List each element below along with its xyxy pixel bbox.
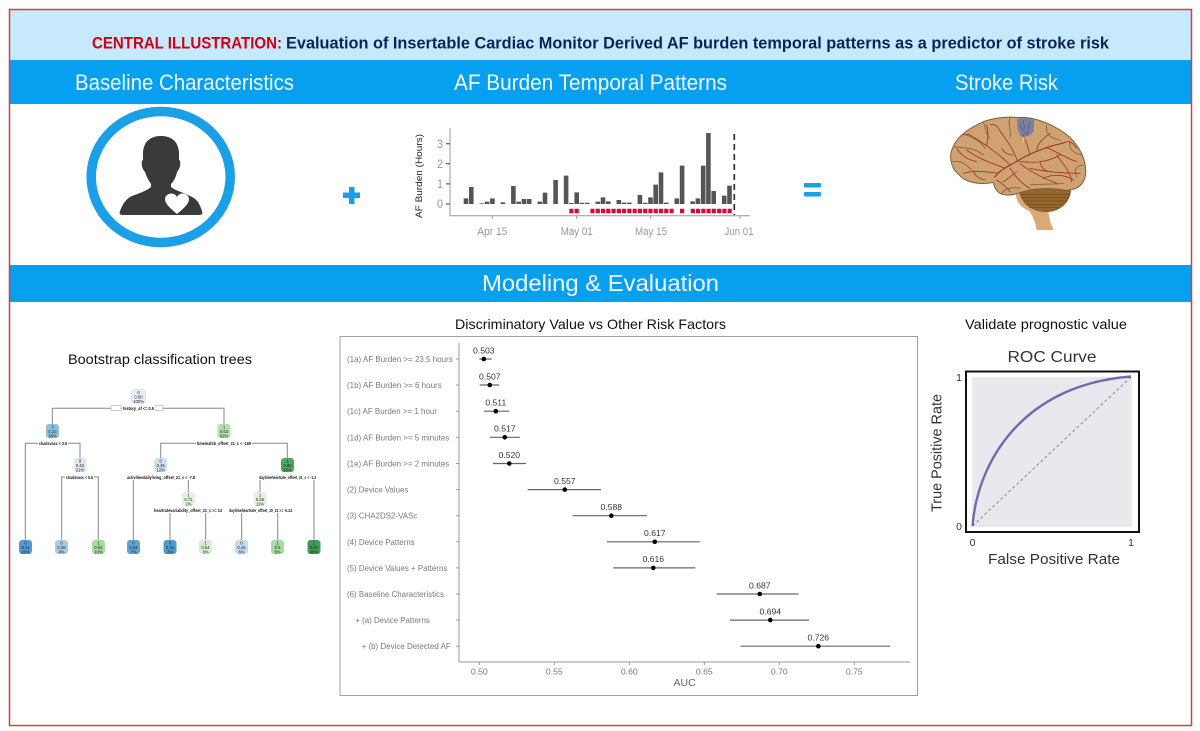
split labels: chadsvasc < 5.5: [66, 475, 93, 480]
row labels: + (b) Device Detected AF: [362, 641, 451, 651]
node: chadsvasc: [74, 458, 86, 472]
heading: Discriminatory Value vs Other Risk Factors: Discriminatory Value vs Other Risk Factors: [455, 316, 726, 332]
node: history positive: 62%: [220, 434, 228, 438]
x axis ticks and title: 0.50: [471, 666, 488, 676]
ROC curve chart: ROC Curve: [1008, 349, 1097, 366]
leaf nodes: 0.67: [310, 545, 319, 550]
node: history negative: [46, 424, 59, 438]
node: activities: 0.45: [157, 463, 165, 468]
leaf nodes: 0.6: [275, 545, 281, 550]
row labels: (1a) AF Burden >= 23.5 hours: [347, 354, 453, 364]
AUC value labels: 0.511: [485, 398, 506, 408]
icon: patient with heart in blue ring: [91, 112, 230, 242]
leaf nodes: 0.16: [166, 545, 175, 550]
row labels: (6) Baseline Characteristics: [347, 589, 444, 599]
section header band: Modeling & Evaluation: Modeling & Evaluation: [482, 270, 719, 296]
node: history positive: [218, 424, 230, 438]
x axis dates: [477, 226, 754, 238]
section header band: Modeling & Evaluation: [10, 265, 1191, 302]
split labels: daytimeheartrate_offset_21_c < -1.3: [259, 475, 316, 480]
split labels: [38, 405, 317, 513]
node: root: [132, 390, 146, 404]
node: root: 0: [137, 390, 140, 395]
AUC value labels: [473, 345, 829, 642]
node: root: 100%: [133, 399, 144, 404]
ROC curve chart: 1: [956, 372, 962, 384]
leaf nodes: [19, 540, 320, 554]
decision tree diagram: [19, 390, 320, 554]
daily burden bars: [464, 133, 732, 204]
AUC value labels: 0.520: [499, 450, 520, 460]
title banner: Evaluation of Insertable Cardiac Monitor Derived AF burden temporal patterns as a predictor of stroke risk: [286, 34, 1110, 52]
title banner: CENTRAL ILLUSTRATION:: [92, 34, 282, 52]
icon: brain with stroke region: [951, 117, 1086, 230]
section header band: top row: [10, 60, 1191, 104]
leaf nodes: 0.54: [201, 545, 210, 550]
node: chadsvasc: 0.42: [76, 463, 85, 468]
node: daytime offset: 11%: [256, 502, 264, 506]
heading: Validate prognostic value: Validate prognostic value: [965, 317, 1127, 332]
section header band: top row: AF Burden Temporal Patterns: [454, 70, 727, 95]
forest plot panel: [340, 336, 918, 696]
x axis ticks and title: 0.65: [696, 666, 713, 676]
node: activities: [154, 458, 167, 472]
icon: plus sign: [343, 187, 360, 204]
leaf nodes: 0: [60, 540, 63, 546]
node: daytime heart rate: 1: [286, 458, 289, 464]
heading: Bootstrap classification trees: Bootstrap classification trees: [68, 351, 252, 367]
AUC value labels: 0.687: [749, 580, 771, 590]
section header band: top row: Baseline Characteristics: [75, 70, 294, 95]
leaf nodes: 1: [204, 540, 207, 546]
ROC curve chart: True Positive Rate: [928, 394, 946, 512]
leaf nodes: 0: [240, 540, 243, 546]
node: daytime heart rate: [281, 458, 294, 472]
leaf nodes: 4%: [58, 550, 65, 554]
row labels: (4) Device Patterns: [347, 537, 415, 547]
section header band: top row: Stroke Risk: [955, 70, 1059, 95]
AUC value labels: 0.507: [479, 371, 501, 381]
row labels: [347, 354, 453, 651]
red event markers: [569, 209, 732, 213]
title banner: [10, 10, 1191, 60]
leaf nodes: 0.34: [129, 545, 138, 550]
x axis ticks and title: [471, 666, 863, 689]
node: activities: 0: [160, 458, 163, 464]
split labels: history_af <= 0.5: [123, 406, 154, 411]
y axis numbers: [437, 137, 443, 211]
y axis numbers: 3: [437, 137, 443, 151]
leaf nodes: 48%: [310, 550, 318, 554]
AUC value labels: 0.617: [644, 528, 666, 538]
node: chadsvasc: 0: [79, 458, 82, 464]
row labels: (1c) AF Burden >= 1 hour: [347, 406, 437, 416]
node: variability: 2%: [185, 502, 192, 506]
x axis ticks and title: 0.60: [621, 666, 638, 676]
y axis numbers: 1: [437, 177, 443, 191]
node: variability: [182, 492, 195, 506]
y axis ticks: [446, 144, 450, 204]
x axis ticks and title: AUC: [674, 677, 696, 689]
split labels: activitiesdailyliving_offset_21_c < -7.8: [127, 475, 195, 480]
node: variability: 1: [187, 492, 190, 498]
leaf nodes: 0.45: [237, 545, 246, 550]
row labels: (1b) AF Burden >= 6 hours: [347, 380, 442, 390]
node: history negative: 0.23: [48, 429, 57, 434]
node: daytime heart rate: 50%: [283, 468, 292, 472]
axis label: AF Burden (Hours): AF Burden (Hours): [414, 134, 425, 218]
x axis dates: May 01: [561, 226, 593, 238]
AUC value labels: 0.557: [554, 476, 576, 486]
x axis dates: Apr 15: [477, 226, 507, 238]
leaf nodes: 10%: [94, 550, 103, 554]
row labels: (1d) AF Burden >= 5 minutes: [347, 432, 449, 442]
leaf nodes: 0: [24, 540, 27, 546]
ROC curve chart: [928, 349, 1139, 568]
AUC value labels: 0.588: [601, 502, 622, 512]
x axis dates: Jun 01: [724, 226, 754, 238]
leaf nodes: 3%: [167, 550, 173, 554]
row labels: + (a) Device Patterns: [355, 615, 430, 625]
split labels: daytimeheartrate_offset_10_21 >= -0.24: [229, 508, 292, 513]
split labels: heartratevariability_offset_21_c >= 13: [154, 508, 222, 513]
x axis ticks and title: 0.70: [771, 666, 788, 676]
leaf nodes: 20%: [21, 550, 30, 554]
confidence intervals: [479, 359, 890, 646]
bar chart: AF burden over time: [414, 128, 754, 238]
node: daytime heart rate: 0.69: [283, 463, 292, 468]
ROC curve chart: 1: [1128, 537, 1134, 549]
icon: equals sign: [804, 183, 821, 196]
leaf nodes: 0: [169, 540, 172, 546]
node: history positive: 0.63: [220, 429, 229, 434]
AUC value labels: 0.726: [808, 632, 829, 642]
y axis numbers: 0: [437, 197, 443, 211]
point estimates: [482, 357, 821, 648]
split labels: timeinafsh_offset_21_c < -169: [197, 441, 251, 446]
leaf nodes: 0.38: [57, 545, 66, 550]
leaf nodes: 1: [97, 540, 100, 546]
node: history negative: 0: [51, 424, 54, 430]
AUC value labels: 0.616: [643, 554, 664, 564]
leaf nodes: 1: [313, 540, 316, 546]
leaf nodes: 3%: [202, 550, 209, 554]
dashed end line: [733, 134, 735, 215]
row labels: (5) Device Values + Patterns: [347, 563, 447, 573]
AUC value labels: 0.694: [760, 606, 781, 616]
leaf nodes: 0.11: [22, 545, 30, 550]
node: daytime offset: 0.55: [256, 497, 265, 502]
leaf nodes: 1: [276, 540, 279, 546]
axes: [450, 128, 750, 219]
ROC curve chart: 0: [956, 521, 962, 533]
leaf nodes: 0.64: [94, 545, 103, 550]
x axis ticks and title: 0.75: [846, 666, 863, 676]
row labels: (3) CHA2DS2-VASc: [347, 511, 418, 521]
branches: [25, 408, 314, 540]
x axis dates: May 15: [635, 226, 667, 238]
row labels: (2) Device Values: [347, 485, 408, 495]
split labels: chadsvasc < 3.5: [39, 441, 67, 446]
node: history positive: 1: [223, 424, 226, 430]
ROC curve chart: False Positive Rate: [988, 551, 1120, 568]
leaf nodes: 6%: [238, 550, 245, 554]
axes: [456, 343, 910, 665]
y axis numbers: 2: [437, 157, 443, 171]
node: activities: 12%: [157, 468, 165, 472]
node: root: 0.50: [134, 394, 143, 400]
node: chadsvasc: 21%: [76, 468, 84, 472]
node: variability: 0.71: [184, 497, 193, 502]
node: daytime offset: [254, 492, 266, 506]
AUC value labels: 0.503: [473, 345, 495, 355]
leaf nodes: 7%: [130, 550, 137, 554]
AUC value labels: 0.517: [494, 424, 516, 434]
node: history negative: 38%: [48, 434, 57, 438]
leaf nodes: 5%: [274, 550, 281, 554]
leaf nodes: 0: [132, 540, 135, 546]
x axis ticks and title: 0.55: [546, 666, 563, 676]
node: daytime offset: 1: [259, 492, 262, 498]
row labels: (1e) AF Burden >= 2 minutes: [347, 458, 449, 468]
ROC curve chart: 0: [970, 537, 976, 549]
